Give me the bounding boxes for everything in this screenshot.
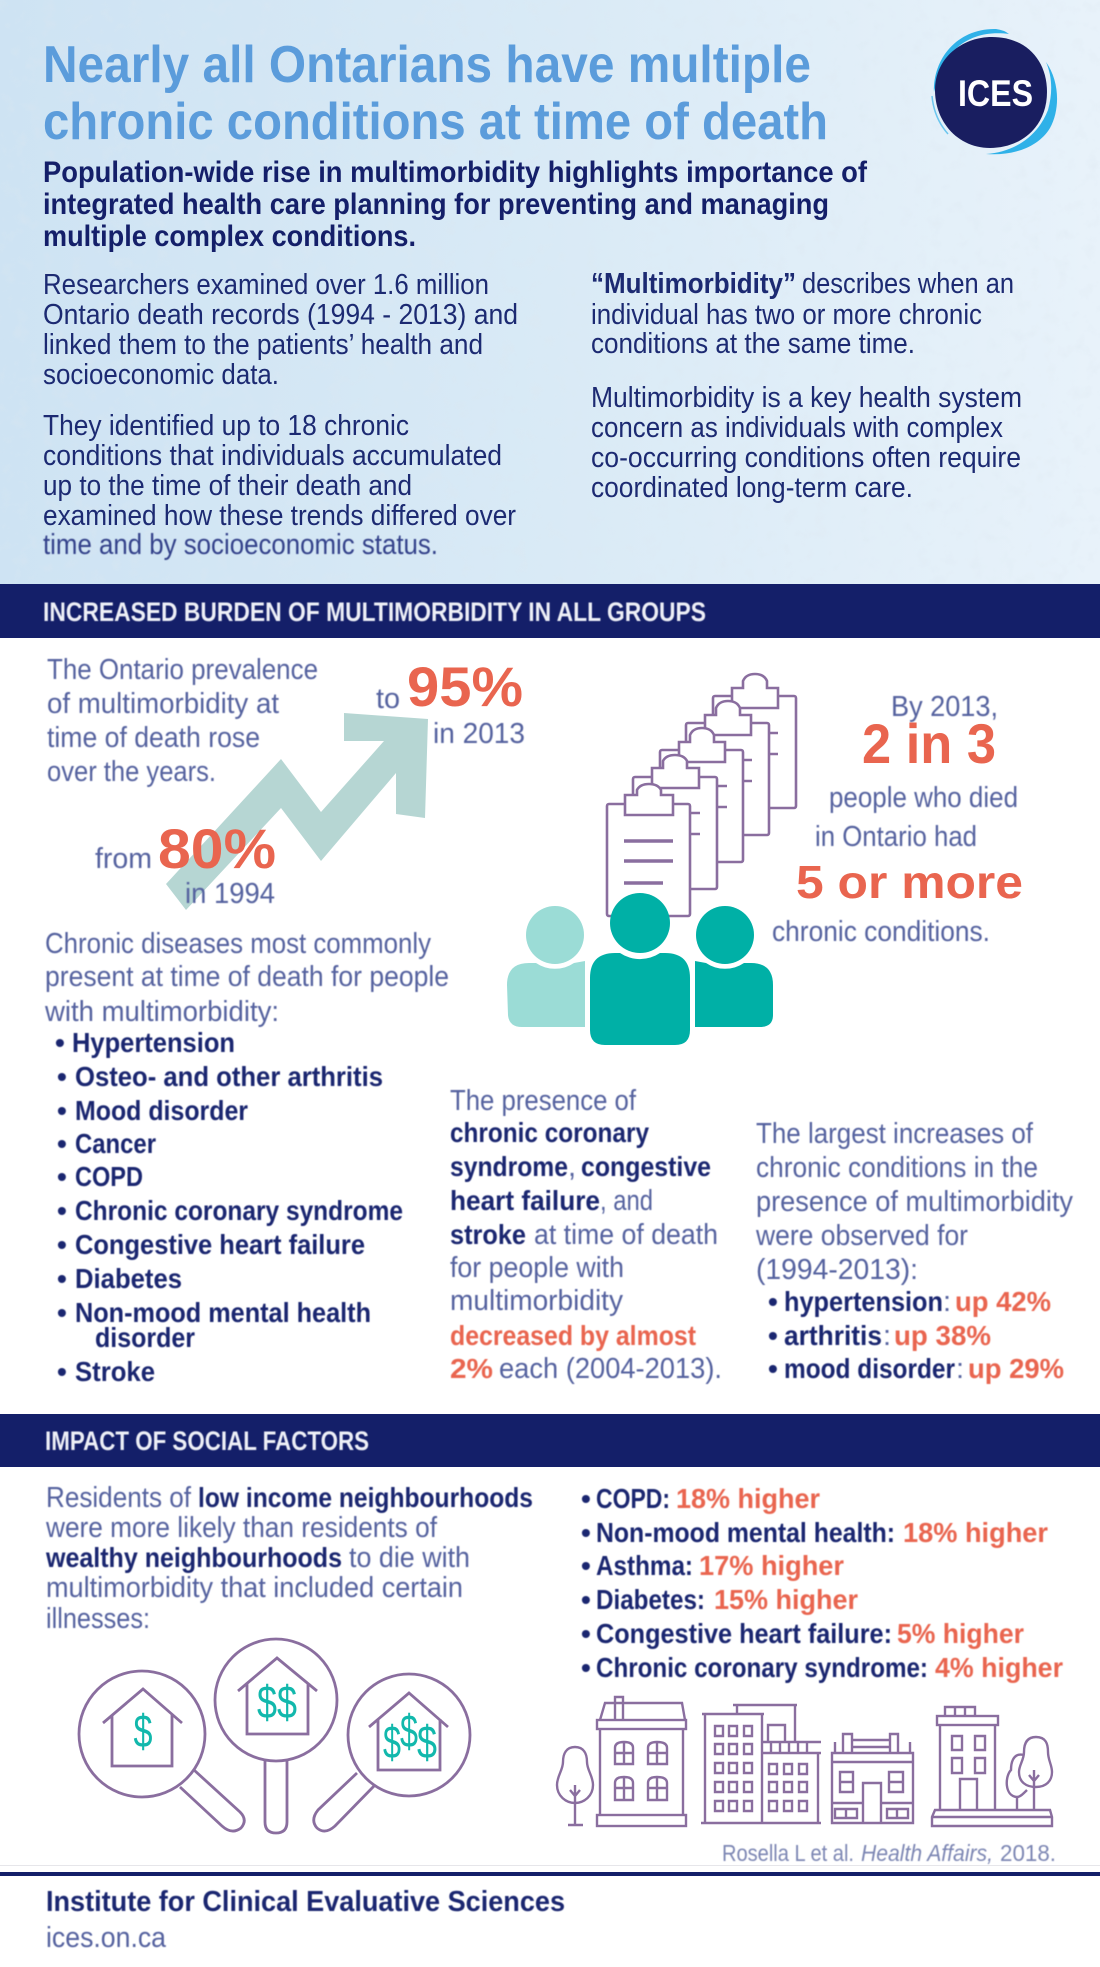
text block: decreases in presence: congestive: [581, 1151, 711, 1182]
text block: prevalence intro: [47, 654, 318, 788]
list: chronic diseases: Non-mood mental health: [75, 1297, 371, 1328]
text block: study description: conditions that individuals accumulated: [43, 440, 502, 472]
list: chronic diseases: COPD: [75, 1161, 143, 1192]
text block: decreases in presence: The presence of: [450, 1085, 637, 1117]
icon: magnifier, high income house: $: [383, 1716, 401, 1768]
list: higher illness rates: •: [581, 1517, 591, 1548]
list: chronic diseases: •: [57, 1161, 67, 1192]
text block: study description: up to the time of their death and: [43, 470, 412, 502]
citation: [722, 1840, 1056, 1866]
text block: largest increases: •: [768, 1286, 778, 1317]
text block: chronic diseases intro: Chronic diseases most commonly: [45, 928, 431, 960]
icon: narrow tower: [932, 1707, 1052, 1826]
icon: left tree: [557, 1747, 593, 1825]
section heading: impact of social factors: [0, 1414, 1100, 1467]
text block: prevalence intro: of multimorbidity at: [47, 688, 279, 720]
icon: neighbourhood buildings: [557, 1697, 1052, 1826]
list: chronic diseases: •: [57, 1128, 67, 1159]
text block: chronic diseases intro: with multimorbidity:: [44, 996, 279, 1028]
text block: decreases in presence: decreased by almost: [450, 1320, 696, 1351]
text block: decreases in presence: ,: [568, 1151, 576, 1183]
stat: 2 in 3 with 5 or more conditions: By 2013,: [891, 691, 998, 723]
icon: magnifier, middle income house: [215, 1639, 337, 1833]
list: chronic diseases: Chronic coronary syndrome: [75, 1195, 403, 1226]
text block: decreases in presence: , and: [600, 1185, 653, 1217]
section heading: increased burden: INCREASED BURDEN OF MULTIMORBIDITY IN ALL GROUPS: [43, 597, 706, 627]
title: chronic conditions at time of death: [43, 93, 828, 151]
text block: low income neighbourhoods: Residents of: [46, 1482, 192, 1514]
text block: low income neighbourhoods: to die with: [349, 1542, 470, 1574]
text block: largest increases: •: [768, 1353, 778, 1384]
text block: low income neighbourhoods: low income neighbourhoods: [198, 1482, 533, 1513]
list: higher illness rates: Congestive heart failure:: [596, 1618, 892, 1649]
panel: header background: [0, 0, 1100, 585]
citation: Rosella L et al.: [722, 1840, 854, 1866]
text block: decreases in presence: multimorbidity: [450, 1285, 623, 1317]
footer: organisation name and site: [46, 1886, 565, 1954]
text block: decreases in presence: heart failure: [450, 1185, 600, 1216]
stat: 2 in 3 with 5 or more conditions: in Ontario had: [815, 821, 977, 853]
citation: 2018.: [1000, 1840, 1056, 1866]
section heading: increased burden: [0, 584, 1100, 638]
text block: largest increases: The largest increases of: [756, 1118, 1034, 1150]
text block: largest increases: hypertension: [784, 1286, 943, 1317]
list: chronic diseases: disorder: [95, 1322, 195, 1353]
stat: 95% in 2013: to: [376, 683, 400, 715]
icon: magnifier, low income house: [79, 1671, 244, 1831]
text block: multimorbidity definition: coordinated long-term care.: [591, 472, 913, 504]
text block: low income neighbourhoods: illnesses:: [46, 1603, 150, 1635]
footer: organisation name and site: Institute for Clinical Evaluative Sciences: [46, 1886, 565, 1918]
list: higher illness rates: •: [581, 1618, 591, 1649]
list: chronic diseases: Mood disorder: [75, 1095, 248, 1126]
text block: decreases in presence: 2%: [450, 1353, 493, 1384]
text block: largest increases: presence of multimorbidity: [756, 1186, 1073, 1218]
list: higher illness rates: Non-mood mental health:: [596, 1517, 895, 1548]
icon: right trees: [1007, 1737, 1052, 1810]
icon: low-rise building: [832, 1734, 913, 1823]
text block: multimorbidity definition: describes when an: [802, 268, 1014, 300]
subtitle: [43, 156, 868, 253]
icon: magnifier, high income house: $: [400, 1705, 418, 1757]
text block: low income neighbourhoods: wealthy neighbourhoods: [45, 1542, 342, 1573]
text block: chronic diseases intro: [44, 928, 449, 1028]
list: chronic diseases: •: [57, 1297, 67, 1328]
list: higher illness rates: •: [581, 1550, 591, 1581]
list: higher illness rates: [581, 1483, 1063, 1683]
text block: decreases in presence: stroke: [450, 1219, 526, 1250]
text block: multimorbidity definition: “Multimorbidity”: [591, 268, 796, 300]
icon: ICES logo: ICES: [958, 73, 1033, 114]
subtitle: multiple complex conditions.: [43, 220, 416, 253]
icon: magnifier, high income house: $: [417, 1716, 437, 1768]
footer divider: [0, 1872, 1100, 1876]
text block: study description: linked them to the patients’ health and: [43, 329, 483, 361]
stat: 2 in 3 with 5 or more conditions: 5 or more: [796, 856, 1023, 908]
text block: largest increases: :: [883, 1320, 891, 1352]
text block: prevalence intro: time of death rose: [47, 722, 260, 754]
stat: 80% in 1994: from: [95, 843, 152, 875]
text block: decreases in presence: [450, 1085, 722, 1385]
subtitle: Population-wide rise in multimorbidity highlights importance of: [43, 156, 868, 189]
citation: Health Affairs,: [861, 1840, 993, 1866]
section heading: impact of social factors: IMPACT OF SOCIAL FACTORS: [45, 1426, 369, 1456]
text block: decreases in presence: chronic coronary: [450, 1117, 649, 1148]
text block: multimorbidity definition: Multimorbidity is a key health system: [591, 382, 1022, 414]
text block: decreases in presence: at time of death: [534, 1219, 718, 1251]
title: Nearly all Ontarians have multiple: [43, 36, 811, 94]
list: higher illness rates: •: [581, 1584, 591, 1615]
text block: study description: Ontario death records (1994 - 2013) and: [43, 299, 518, 331]
list: chronic diseases: Stroke: [75, 1356, 155, 1387]
stat: 95% in 2013: 95%: [407, 655, 523, 718]
text block: prevalence intro: over the years.: [47, 756, 216, 788]
list: higher illness rates: COPD:: [596, 1483, 670, 1514]
list: higher illness rates: Asthma:: [596, 1550, 693, 1581]
list: chronic diseases: •: [57, 1095, 67, 1126]
list: chronic diseases: Cancer: [75, 1128, 156, 1159]
text block: decreases in presence: for people with: [450, 1252, 624, 1284]
icon: group of people: [507, 893, 773, 1045]
stat: 80% in 1994: 80%: [158, 817, 276, 880]
text block: largest increases: [755, 1118, 1073, 1385]
list: chronic diseases: Diabetes: [75, 1263, 182, 1294]
list: chronic diseases: Congestive heart failure: [75, 1229, 365, 1260]
stat: 80% in 1994: [95, 817, 276, 910]
list: chronic diseases: •: [55, 1027, 65, 1058]
text block: largest increases: chronic conditions in the: [756, 1152, 1038, 1184]
icon: magnifier, low income house: $: [134, 1705, 152, 1757]
text block: multimorbidity definition: [591, 268, 1022, 504]
icon: tall building with arched windows: [597, 1697, 686, 1826]
list: chronic diseases: •: [57, 1229, 67, 1260]
list: higher illness rates: •: [581, 1652, 591, 1683]
footer: organisation name and site: ices.on.ca: [46, 1922, 167, 1954]
text block: study description: examined how these trends differed over: [43, 500, 516, 532]
text block: largest increases: up 29%: [968, 1353, 1064, 1384]
text block: largest increases: (1994-2013):: [756, 1254, 918, 1286]
text block: chronic diseases intro: present at time of death for people: [45, 961, 449, 993]
stat: 95% in 2013: [376, 655, 525, 750]
title: [43, 36, 828, 151]
icon: magnifier, high income house: [314, 1674, 470, 1831]
text block: largest increases: arthritis: [784, 1320, 882, 1351]
text block: study description: They identified up to 18 chronic: [43, 410, 409, 442]
text block: decreases in presence: each (2004-2013).: [499, 1353, 722, 1385]
stat: 2 in 3 with 5 or more conditions: chronic conditions.: [772, 916, 990, 948]
text block: multimorbidity definition: individual has two or more chronic: [591, 299, 982, 331]
text block: study description: socioeconomic data.: [43, 359, 279, 391]
stat: 2 in 3 with 5 or more conditions: 2 in 3: [862, 712, 996, 775]
text block: largest increases: up 42%: [955, 1286, 1051, 1317]
list: higher illness rates: 18% higher: [903, 1517, 1048, 1548]
icon: stacked clipboards: [607, 674, 796, 916]
text block: multimorbidity definition: co-occurring conditions often require: [591, 442, 1021, 474]
text block: decreases in presence: syndrome: [450, 1151, 568, 1182]
list: chronic diseases: •: [57, 1263, 67, 1294]
list: higher illness rates: 5% higher: [897, 1618, 1024, 1649]
text block: multimorbidity definition: concern as individuals with complex: [591, 412, 1003, 444]
stat: 2 in 3 with 5 or more conditions: people who died: [829, 782, 1018, 814]
text block: largest increases: •: [768, 1320, 778, 1351]
list: higher illness rates: Chronic coronary syndrome:: [596, 1652, 928, 1683]
text block: study description: [43, 269, 518, 561]
list: chronic diseases: •: [57, 1195, 67, 1226]
text block: largest increases: :: [943, 1286, 951, 1318]
text block: largest increases: mood disorder: [784, 1353, 955, 1384]
icon: ICES logo: [932, 29, 1057, 154]
list: higher illness rates: 18% higher: [676, 1483, 820, 1514]
text block: largest increases: up 38%: [894, 1320, 991, 1351]
icon: magnifier, middle income house: $$: [257, 1676, 297, 1728]
list: chronic diseases: Osteo- and other arthritis: [75, 1061, 383, 1092]
icon: apartment block: [701, 1705, 821, 1823]
stat: 80% in 1994: in 1994: [185, 878, 275, 910]
text block: low income neighbourhoods: were more likely than residents of: [45, 1512, 438, 1544]
list: higher illness rates: 4% higher: [935, 1652, 1063, 1683]
list: chronic diseases: Hypertension: [72, 1027, 235, 1058]
list: chronic diseases: •: [57, 1356, 67, 1387]
text block: prevalence intro: The Ontario prevalence: [47, 654, 318, 686]
stat: 2 in 3 with 5 or more conditions: [772, 691, 1023, 948]
text block: largest increases: :: [956, 1353, 964, 1385]
text block: multimorbidity definition: conditions at the same time.: [591, 328, 915, 360]
text block: study description: Researchers examined over 1.6 million: [43, 269, 489, 301]
text block: study description: time and by socioeconomic status.: [43, 529, 438, 561]
list: higher illness rates: 17% higher: [699, 1550, 844, 1581]
subtitle: integrated health care planning for preventing and managing: [43, 188, 829, 221]
text block: low income neighbourhoods: multimorbidity that included certain: [46, 1572, 463, 1604]
stat: 95% in 2013: in 2013: [433, 718, 525, 750]
list: higher illness rates: •: [581, 1483, 591, 1514]
text block: low income neighbourhoods: [45, 1482, 533, 1635]
icon: rising arrow: [166, 713, 428, 910]
list: chronic diseases: [55, 1027, 403, 1387]
list: higher illness rates: 15% higher: [714, 1584, 858, 1615]
list: chronic diseases: •: [57, 1061, 67, 1092]
list: higher illness rates: Diabetes:: [596, 1584, 705, 1615]
text block: largest increases: were observed for: [755, 1220, 968, 1252]
